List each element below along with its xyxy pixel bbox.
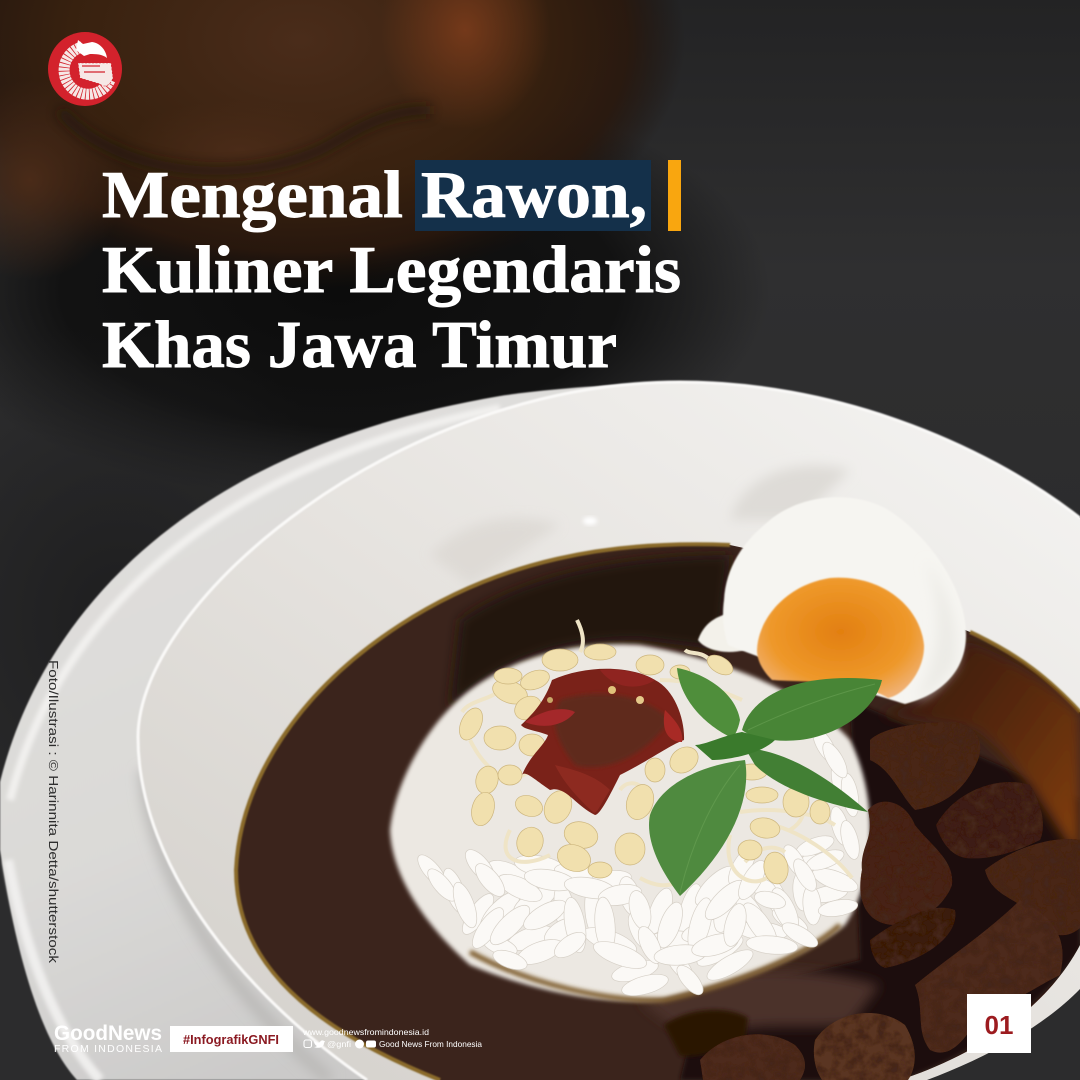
rice mound bbox=[390, 644, 870, 1001]
icon: youtube bbox=[366, 1040, 376, 1048]
title highlight box bbox=[415, 160, 651, 231]
orange cursor bar bbox=[668, 160, 681, 231]
title: Rawon, bbox=[421, 158, 647, 232]
plate under the bowl bbox=[0, 384, 640, 1080]
footer: hashtag badge bbox=[170, 1026, 293, 1052]
mung bean sprouts bbox=[455, 620, 852, 886]
footer: GoodNews From Indonesia logo: GoodNews bbox=[54, 1022, 162, 1045]
egg yolk bbox=[757, 578, 924, 698]
footer: hashtag badge: #InfografikGNFI bbox=[183, 1032, 279, 1047]
footer: GoodNews From Indonesia logo bbox=[54, 1022, 162, 1055]
murky reflection below rice bbox=[648, 969, 880, 1034]
footer: GoodNews From Indonesia logo: FROM INDONESIA bbox=[54, 1043, 162, 1055]
title: Khas Jawa Timur bbox=[102, 308, 617, 382]
sambal bbox=[521, 669, 684, 815]
footer: website and social handles: @gnfi bbox=[327, 1039, 351, 1049]
title: Mengenal bbox=[102, 158, 403, 232]
footer: website and social handles: Good News From Indonesia bbox=[379, 1039, 482, 1049]
emblem ring bbox=[64, 47, 110, 94]
title bbox=[102, 158, 681, 382]
soup: rawon broth bbox=[236, 544, 1080, 1080]
basil leaves bbox=[649, 668, 882, 896]
logo: GNFI garuda emblem bbox=[48, 32, 122, 106]
photo credit: Foto/Ilustrasi : © Harinnita Detta/shutterstock bbox=[46, 660, 60, 964]
dark soup near the top bbox=[450, 555, 730, 710]
egg bbox=[698, 497, 966, 704]
background: blurred clay pot at top left bbox=[0, 0, 685, 290]
icon: twitter bbox=[314, 1040, 325, 1048]
beef chunks bbox=[700, 722, 1080, 1080]
rice grains: under layer bbox=[413, 725, 853, 986]
footer: website and social handles bbox=[302, 1027, 482, 1049]
icon: facebook bbox=[355, 1040, 364, 1048]
title: Kuliner Legendaris bbox=[102, 233, 681, 307]
bowl bbox=[138, 382, 1080, 1080]
rice grains bbox=[423, 739, 863, 1000]
footer: website and social handles: www.goodnewsfromindonesia.id bbox=[302, 1027, 429, 1037]
page number badge bbox=[967, 994, 1031, 1053]
amber broth at right bbox=[890, 636, 1080, 840]
dark broth beside the beef bbox=[680, 700, 1080, 1080]
icon: instagram bbox=[304, 1040, 312, 1048]
page number badge: 01 bbox=[985, 1010, 1013, 1040]
